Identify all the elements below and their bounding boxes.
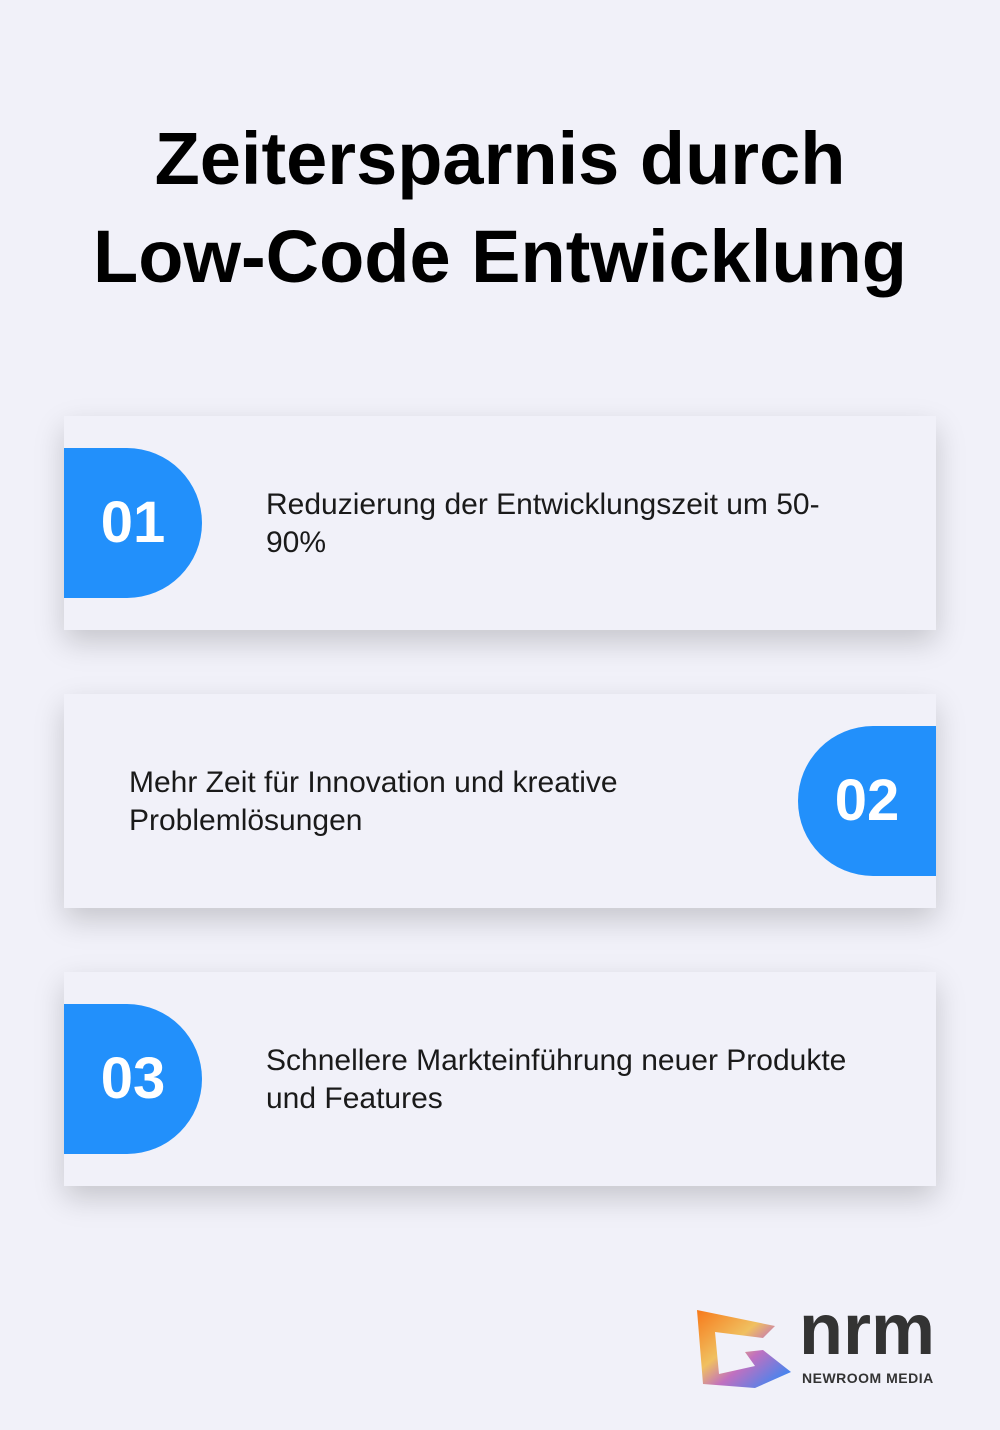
text 1 [266,488,820,559]
card 3 [64,972,936,1186]
text 2: Mehr Zeit für Innovation und kreative [129,766,618,799]
badge 01: 01 [101,490,165,555]
text 3: Schnellere Markteinführung neuer Produkte [266,1044,846,1077]
logo: NEWROOM MEDIA [802,1370,934,1386]
title [93,117,907,298]
title: Low-Code Entwicklung [93,215,907,298]
text 3: und Features [266,1082,443,1115]
badge 01 [64,448,202,598]
badge 03 [64,1004,202,1154]
title: Zeitersparnis durch [155,117,845,200]
text 1: 90% [266,526,326,559]
text 2: Problemlösungen [129,804,362,837]
icon: logo mark [697,1310,791,1388]
text 2 [129,766,618,837]
text 1: Reduzierung der Entwicklungszeit um 50- [266,488,820,521]
badge 03: 03 [101,1046,165,1111]
card 2 [64,694,936,908]
text 3 [266,1044,846,1115]
logo text: nrm [799,1290,935,1370]
logo [697,1290,935,1388]
badge 02 [798,726,936,876]
badge 02: 02 [835,768,899,833]
card 1 [64,416,936,630]
